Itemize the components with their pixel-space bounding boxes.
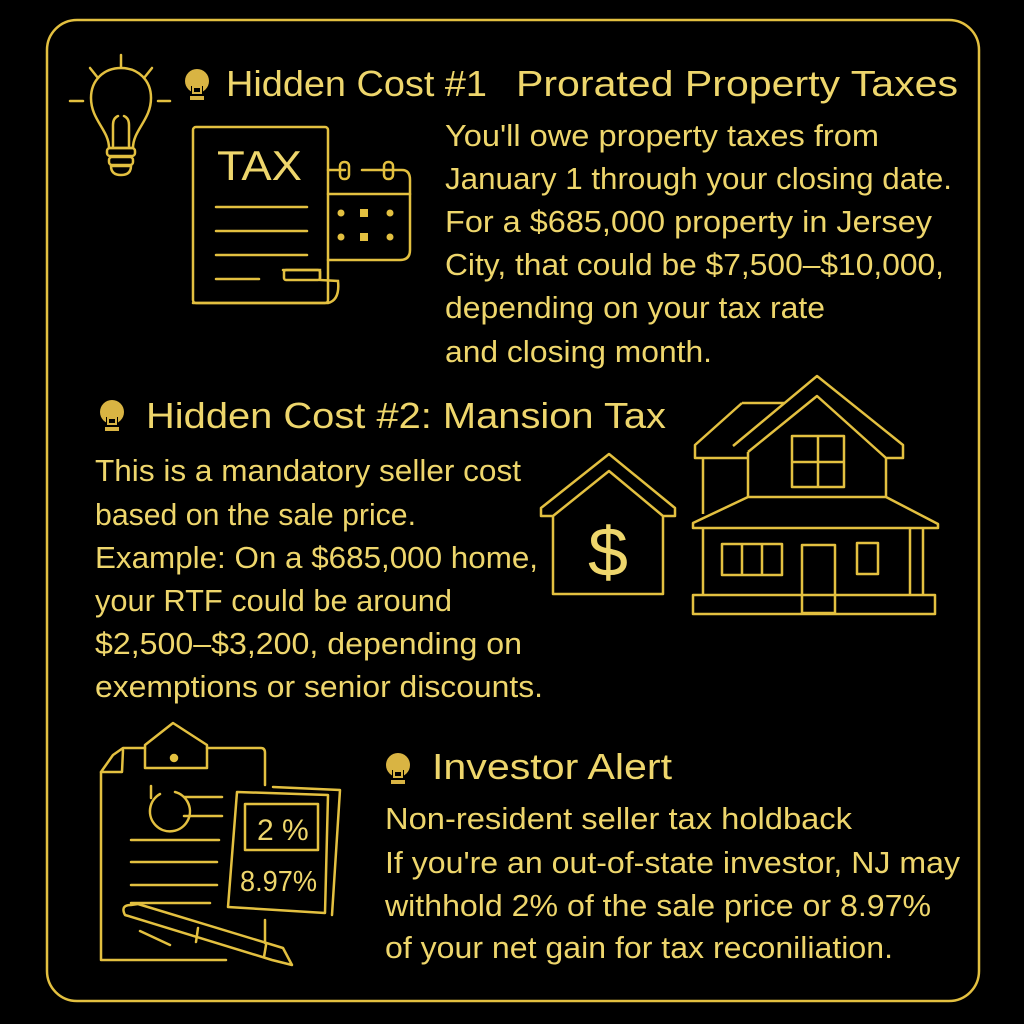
- icon: tax document with calendar: TAX: [217, 142, 302, 189]
- text block: cost 2 body: your RTF could be around: [95, 583, 452, 618]
- icon: small house with dollar: [541, 454, 675, 594]
- icon: large lightbulb: [70, 55, 170, 175]
- text block: cost 1 body: City, that could be $7,500–$10,000,: [445, 247, 944, 282]
- heading: hidden cost 2: Hidden Cost #2: Mansion Tax: [146, 395, 666, 436]
- icon: clipboard with calculator and pen: 2 %: [257, 814, 309, 847]
- icon: clipboard with calculator and pen: [101, 723, 340, 965]
- heading: hidden cost 1: Hidden Cost #1: [226, 63, 487, 104]
- text block: investor body: Non-resident seller tax holdback: [385, 801, 853, 836]
- icon: clipboard with calculator and pen: 8.97%: [240, 866, 317, 898]
- icon: small bulb 2: [100, 400, 124, 431]
- heading: investor alert: Investor Alert: [432, 746, 672, 787]
- text block: cost 1 body: and closing month.: [445, 334, 712, 369]
- icon: tax document with calendar: [193, 127, 410, 303]
- text block: cost 2 body: based on the sale price.: [95, 497, 416, 532]
- icon: small bulb 1: [185, 69, 209, 100]
- text block: cost 1 body: January 1 through your closing date.: [445, 161, 952, 196]
- text block: investor body: withhold 2% of the sale price or 8.97%: [384, 888, 931, 923]
- text block: investor body: of your net gain for tax reconiliation.: [385, 930, 893, 965]
- text block: cost 1 body: You'll owe property taxes from: [445, 118, 879, 153]
- text block: cost 2 body: Example: On a $685,000 home,: [95, 540, 538, 575]
- text block: cost 1 body: [445, 118, 952, 369]
- heading: hidden cost 1: [185, 63, 958, 104]
- icon: big house: [693, 376, 938, 614]
- text block: cost 2 body: This is a mandatory seller cost: [95, 453, 521, 488]
- icon: small house with dollar: $: [588, 513, 628, 591]
- text block: investor body: If you're an out-of-state investor, NJ may: [385, 845, 961, 880]
- heading: hidden cost 1: Prorated Property Taxes: [516, 63, 958, 104]
- text block: investor body: [384, 801, 961, 965]
- icon: small bulb 3: [386, 753, 410, 784]
- text block: cost 1 body: depending on your tax rate: [445, 290, 825, 325]
- text block: cost 2 body: $2,500–$3,200, depending on: [95, 626, 522, 661]
- text block: cost 1 body: For a $685,000 property in Jersey: [445, 204, 933, 239]
- text block: cost 2 body: exemptions or senior discounts.: [95, 669, 543, 704]
- text block: cost 2 body: [95, 453, 543, 704]
